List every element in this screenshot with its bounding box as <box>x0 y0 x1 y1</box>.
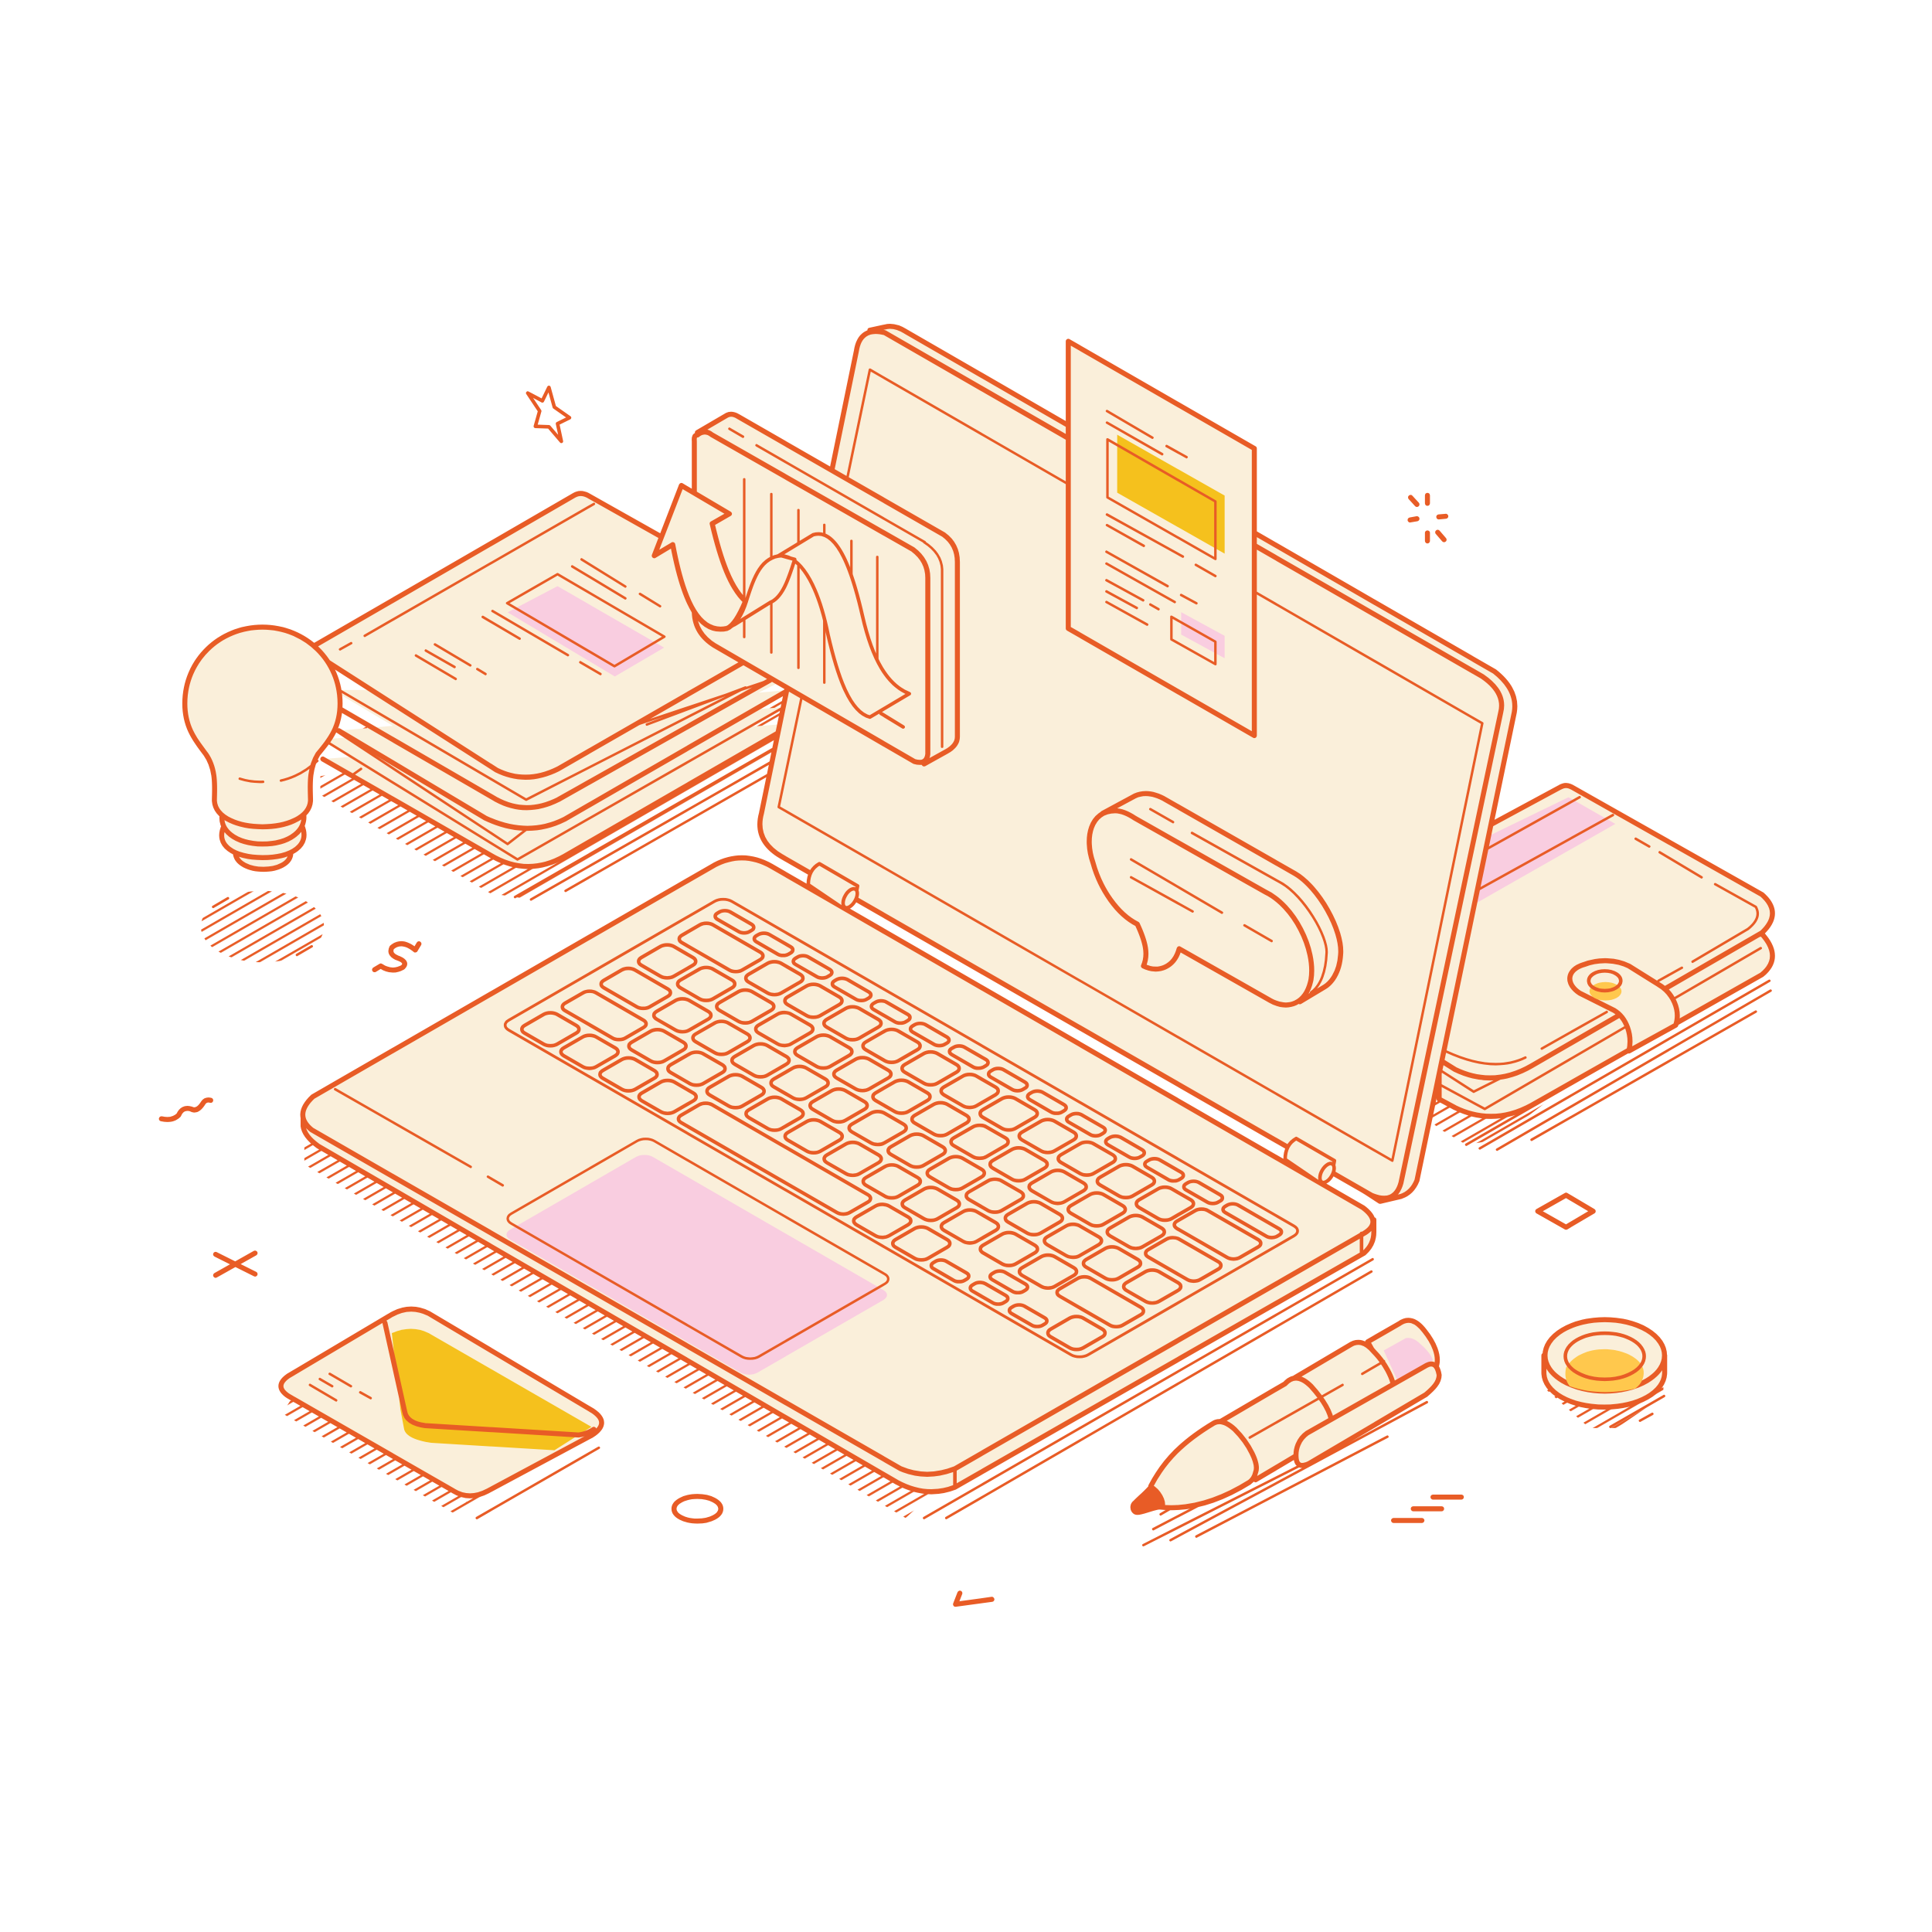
tablet front <box>694 432 928 763</box>
envelope <box>281 1309 601 1496</box>
pen barrel lower <box>1219 1378 1332 1480</box>
pen nib <box>1132 1486 1163 1513</box>
notebook middle cover <box>338 690 788 828</box>
envelope address lines <box>310 1374 371 1400</box>
cover lines <box>1447 838 1757 1064</box>
speech bubble <box>1089 794 1341 1005</box>
pink image block <box>1181 612 1225 658</box>
pen cap end <box>1368 1320 1437 1386</box>
base side <box>303 1109 1374 1492</box>
document text lines <box>1107 411 1216 624</box>
keyboard frame <box>500 896 1303 1359</box>
yellow image block <box>1117 435 1225 553</box>
notebook upper cover <box>342 680 770 808</box>
shadow: right notebook <box>1417 981 1770 1150</box>
envelope flap <box>385 1323 594 1435</box>
chart bars <box>744 479 877 713</box>
screen outline <box>779 369 1482 1161</box>
right hinge <box>1285 1138 1337 1185</box>
left notebook stack <box>308 494 813 866</box>
notebook pink block <box>508 586 664 676</box>
shadow: envelope <box>282 1393 599 1518</box>
trackpad pink fill <box>502 1152 892 1378</box>
notebook page fill <box>332 616 788 807</box>
coin <box>1544 1320 1665 1407</box>
shadow: left notebook stack <box>321 690 788 900</box>
strap button <box>1589 971 1621 1001</box>
coin inner ring <box>1566 1333 1645 1379</box>
key row E <box>675 920 1265 1262</box>
pen clip <box>1296 1364 1439 1465</box>
bubble back <box>1103 794 1341 1002</box>
decoration: squiggle <box>162 1100 211 1120</box>
key row A <box>518 1010 1110 1352</box>
bulb thread upper <box>222 811 304 844</box>
lid front <box>760 332 1502 1198</box>
bulb glass <box>185 628 340 827</box>
decoration: dollar sign <box>375 944 419 970</box>
bubble text lines <box>1131 859 1271 941</box>
decoration: spark <box>1410 495 1446 541</box>
tablet back <box>697 414 957 764</box>
notebook page edges <box>323 707 784 859</box>
envelope yellow inside <box>392 1329 591 1451</box>
notebook text lines <box>416 560 660 679</box>
ribbon fold <box>727 556 794 628</box>
decoration: ring <box>674 1496 721 1521</box>
key row B <box>558 988 1148 1329</box>
shadow: pen <box>1144 1402 1427 1545</box>
coin yellow <box>1566 1349 1644 1392</box>
coin top <box>1545 1320 1665 1391</box>
bulb cap <box>236 852 291 869</box>
coin side <box>1544 1355 1665 1407</box>
decoration: diamond <box>1538 1196 1594 1227</box>
illustration: laptop workspace <box>162 326 1773 1604</box>
pen barrel upper <box>1295 1342 1393 1423</box>
keyboard <box>500 896 1303 1359</box>
trackpad <box>502 1136 893 1378</box>
shadow: bulb <box>201 891 324 962</box>
shadow: laptop <box>304 1128 1372 1518</box>
light bulb <box>185 628 340 869</box>
decoration: star <box>528 387 570 441</box>
chart baseline <box>881 713 903 727</box>
key row D <box>634 943 1226 1284</box>
decoration: cross <box>216 1253 255 1275</box>
strap <box>1570 961 1677 1051</box>
laptop lid <box>760 326 1515 1202</box>
shadow: coin <box>1545 1380 1664 1428</box>
ribbon wave <box>773 534 910 717</box>
decoration: tick <box>955 1594 992 1604</box>
decoration: dashes <box>1393 1497 1461 1520</box>
upper cover <box>1435 785 1773 1078</box>
bulb thread lower <box>222 825 304 858</box>
right notebook <box>1435 785 1773 1117</box>
laptop base <box>303 858 1374 1492</box>
lid back edge <box>862 326 1515 1202</box>
notebook top face <box>308 494 813 777</box>
bubble front <box>1089 811 1311 1005</box>
base top <box>303 858 1373 1475</box>
left hinge <box>808 864 860 910</box>
function key row <box>712 909 1284 1240</box>
key row C <box>597 966 1185 1305</box>
lower cover <box>1439 934 1773 1117</box>
notebook bottom cover <box>323 723 794 866</box>
pen <box>1132 1320 1439 1513</box>
pink bookmark <box>1476 798 1615 903</box>
growth arrow <box>655 485 746 629</box>
pen pink highlight <box>1384 1338 1433 1380</box>
chart tablet <box>655 414 957 764</box>
document card <box>1068 342 1254 736</box>
pen nose cone <box>1151 1422 1257 1508</box>
